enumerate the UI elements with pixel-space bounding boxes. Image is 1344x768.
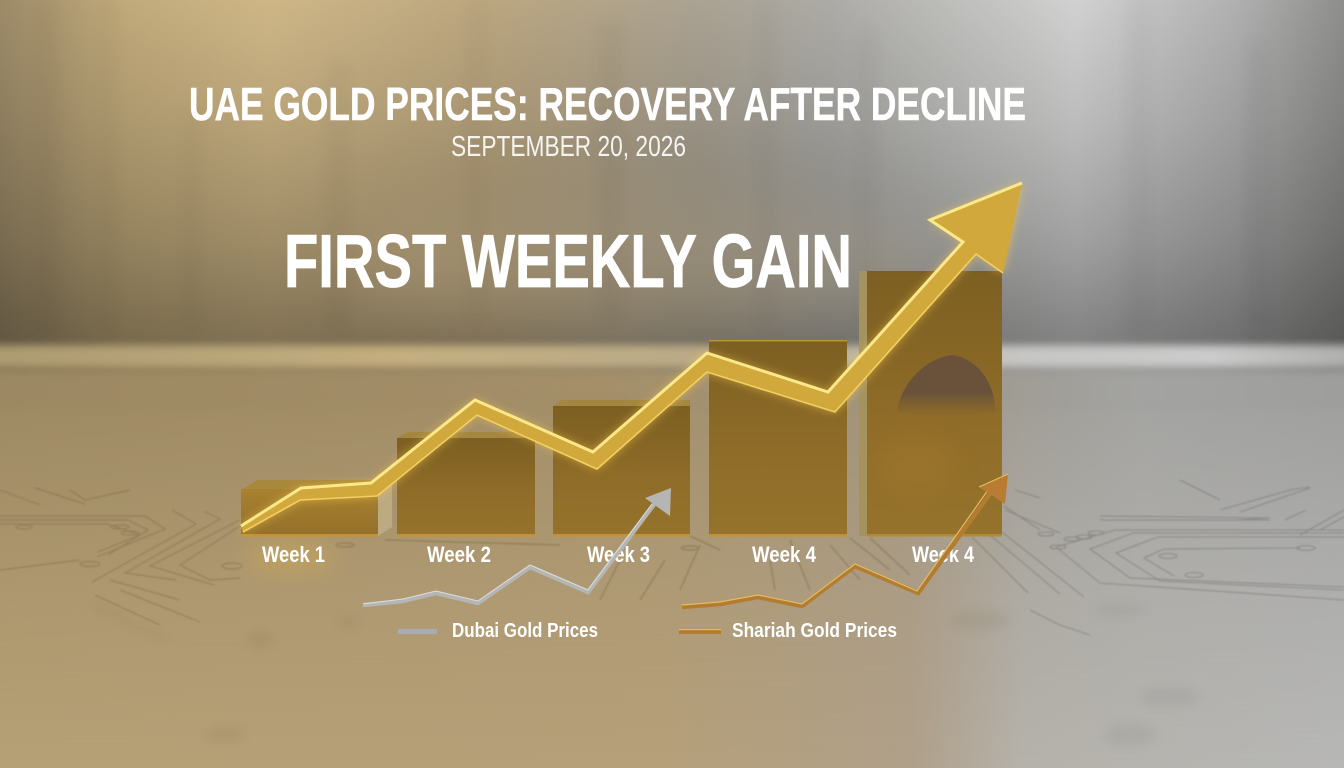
bar: week 2 bbox=[397, 432, 535, 536]
wall vertical streaks bbox=[40, 0, 1264, 335]
week labels: Week 2 bbox=[427, 542, 491, 567]
legend: Dubai: Dubai Gold Prices bbox=[452, 620, 598, 642]
date subtitle: SEPTEMBER 20, 2026 bbox=[451, 131, 686, 163]
gold reflection under Week 1 bbox=[244, 544, 336, 572]
bar: week 3 bbox=[553, 400, 690, 536]
first weekly gain headline: FIRST WEEKLY GAIN bbox=[284, 219, 852, 303]
arrow glow bbox=[241, 183, 1022, 532]
bar: week 4 bbox=[709, 340, 847, 536]
legend: Dubai bbox=[398, 620, 598, 642]
week labels: Week 4 bbox=[752, 542, 817, 567]
blurred floor marks bbox=[92, 603, 1200, 747]
circuit traces: centre bbox=[336, 536, 910, 600]
arrow lower edge bbox=[243, 254, 1003, 532]
bar: week 4 final bbox=[859, 271, 1002, 536]
main gold trend arrow bbox=[241, 183, 1022, 532]
arrow bright edge bbox=[241, 183, 1022, 526]
Dubai gold price line bbox=[363, 488, 671, 605]
title: UAE GOLD PRICES: RECOVERY AFTER DECLINE bbox=[189, 78, 1026, 130]
bar chart bbox=[241, 271, 1002, 536]
week labels bbox=[262, 542, 975, 567]
week labels: Week 4 bbox=[912, 542, 975, 567]
arrow body bbox=[241, 183, 1022, 532]
legend: Shariah bbox=[679, 620, 897, 642]
week labels: Week 1 bbox=[262, 542, 325, 567]
circuit traces: left bbox=[0, 488, 242, 625]
wall centre light bbox=[340, 200, 940, 340]
legend: Shariah: Shariah Gold Prices bbox=[732, 620, 897, 642]
bar: week 1 bbox=[241, 480, 395, 536]
week labels: Week 3 bbox=[587, 542, 650, 567]
Shariah gold price line bbox=[682, 474, 1008, 607]
circuit traces: right bbox=[972, 480, 1344, 635]
